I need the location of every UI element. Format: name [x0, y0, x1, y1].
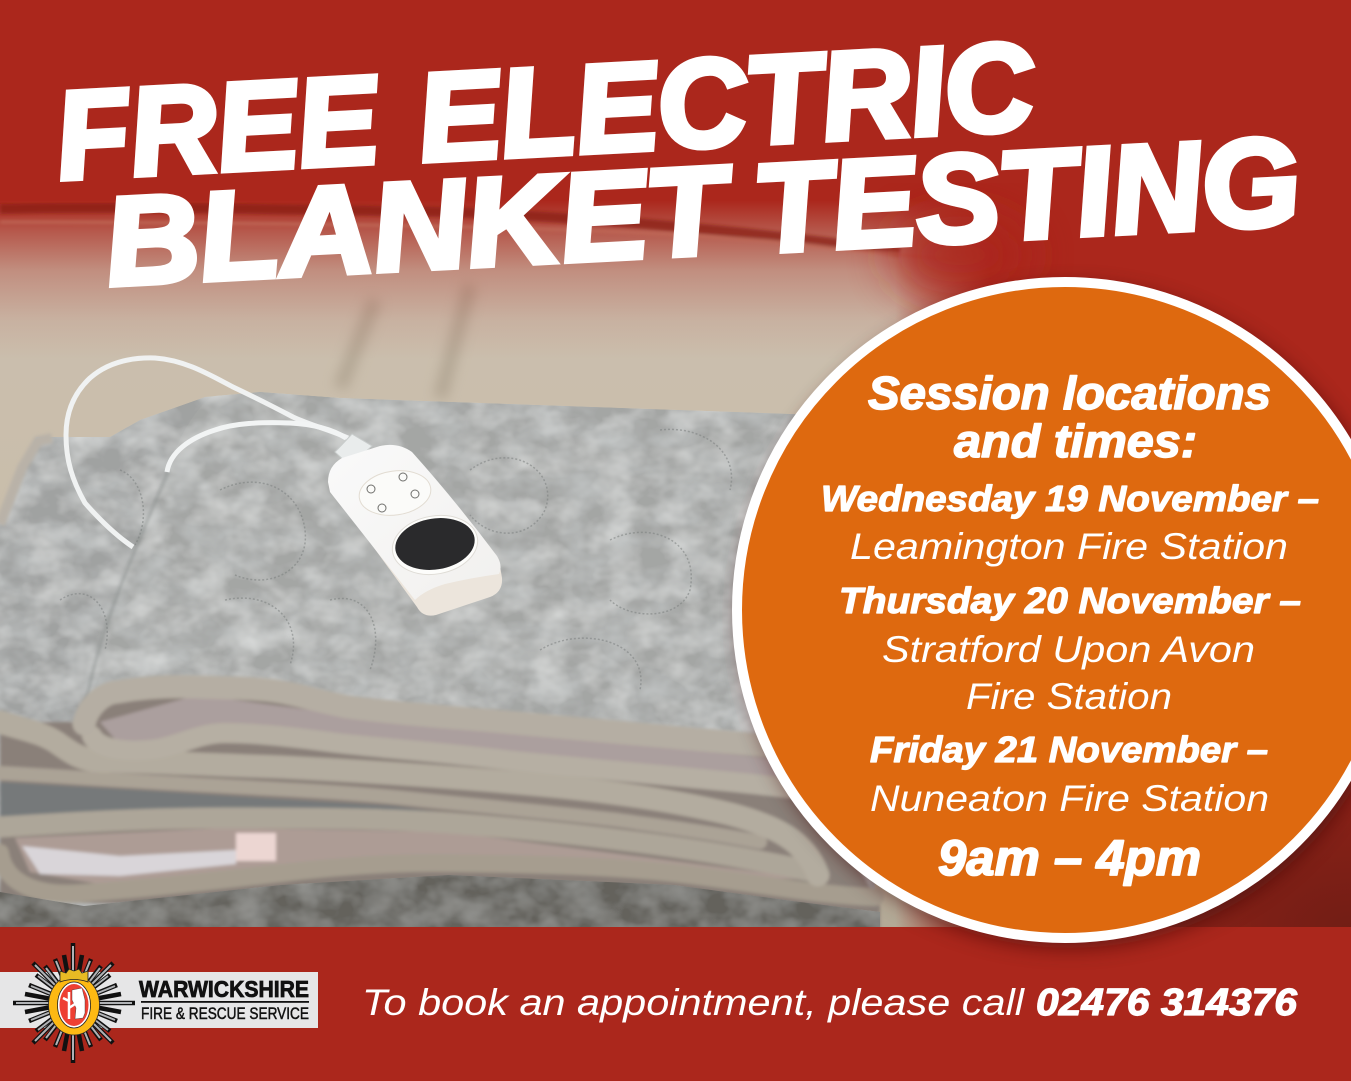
logo text: [139, 976, 309, 1023]
remote control: [328, 434, 502, 616]
right fade into red: [901, 210, 990, 927]
dial: [392, 515, 478, 575]
dark lower right corner: [1168, 781, 1351, 927]
footer band: [0, 927, 1351, 1081]
control oval: [358, 470, 432, 516]
session: Thursday: [839, 580, 1301, 717]
booking call to action: 02476 314376: [1036, 982, 1298, 1024]
logo text: WARWICKSHIRE: [139, 976, 309, 1002]
white fleece: [22, 846, 236, 876]
button icons: [367, 473, 419, 512]
sofa: [0, 170, 1000, 930]
grey blanket between folds: [0, 782, 410, 816]
fleece underside: [15, 828, 820, 884]
session: Thursday: Stratford Upon Avon: [882, 629, 1255, 670]
left blanket piping: [0, 438, 52, 524]
remote cable 1: [66, 358, 348, 547]
heading: and times:: [954, 415, 1197, 467]
title: TESTING: [746, 111, 1308, 279]
session: Thursday: Fire Station: [966, 676, 1172, 717]
soft red glow near circle top: [890, 215, 1030, 295]
sofa seam: [0, 208, 957, 260]
title: FREE: [47, 50, 389, 206]
top fade into red: [0, 170, 985, 336]
cable strain relief: [334, 434, 372, 458]
heading: [868, 367, 1271, 467]
booking call to action: [362, 982, 1298, 1024]
session: Friday: [870, 729, 1269, 819]
circle shadow: [739, 286, 1351, 948]
logo text: FIRE & RESCUE SERVICE: [141, 1004, 309, 1023]
icon: fire service star: [13, 943, 135, 1063]
dial face: [395, 518, 475, 570]
bottom grey blanket: [0, 875, 880, 930]
title: BLANKET: [96, 140, 744, 312]
inner lining: [100, 698, 776, 777]
quilt stitching: [60, 429, 732, 690]
session: Thursday: Thursday 20 November –: [839, 580, 1301, 621]
session: Friday: Friday 21 November –: [870, 729, 1268, 770]
booking call to action: To book an appointment, please call: [362, 982, 1026, 1023]
lower left blanket layer: [0, 392, 880, 930]
title: [47, 16, 1308, 312]
remote cable 2: [167, 423, 346, 472]
top blanket fold: [216, 394, 613, 408]
fold base: [0, 690, 880, 930]
fold shadow: [84, 472, 168, 715]
remote base: [374, 548, 502, 616]
icon: crest: [48, 969, 100, 1035]
folded layers: [0, 687, 880, 930]
remote body: [328, 445, 501, 600]
session: Wednesday: Leamington Fire Station: [850, 526, 1288, 567]
session times: 9am – 4pm: [938, 830, 1201, 886]
circle: [737, 282, 1351, 938]
logo strip: [0, 972, 318, 1028]
band 2: [92, 733, 790, 788]
session: Wednesday: Wednesday 19 November –: [821, 478, 1319, 519]
heading: Session locations: [868, 367, 1271, 419]
band 1: [84, 687, 770, 746]
logo: Warwickshire Fire & Rescue Service: [0, 943, 318, 1063]
title: ELECTRIC: [409, 16, 1043, 188]
band 6: [0, 853, 875, 897]
session: Wednesday: [821, 478, 1319, 567]
panel: session locations circle: [737, 282, 1351, 938]
session: Friday: Nuneaton Fire Station: [870, 778, 1269, 819]
band 4: [0, 773, 760, 842]
band 3: [0, 722, 818, 875]
photo: electric blanket on sofa: [0, 170, 1351, 930]
band 5: [0, 818, 815, 872]
care label: [236, 833, 276, 861]
